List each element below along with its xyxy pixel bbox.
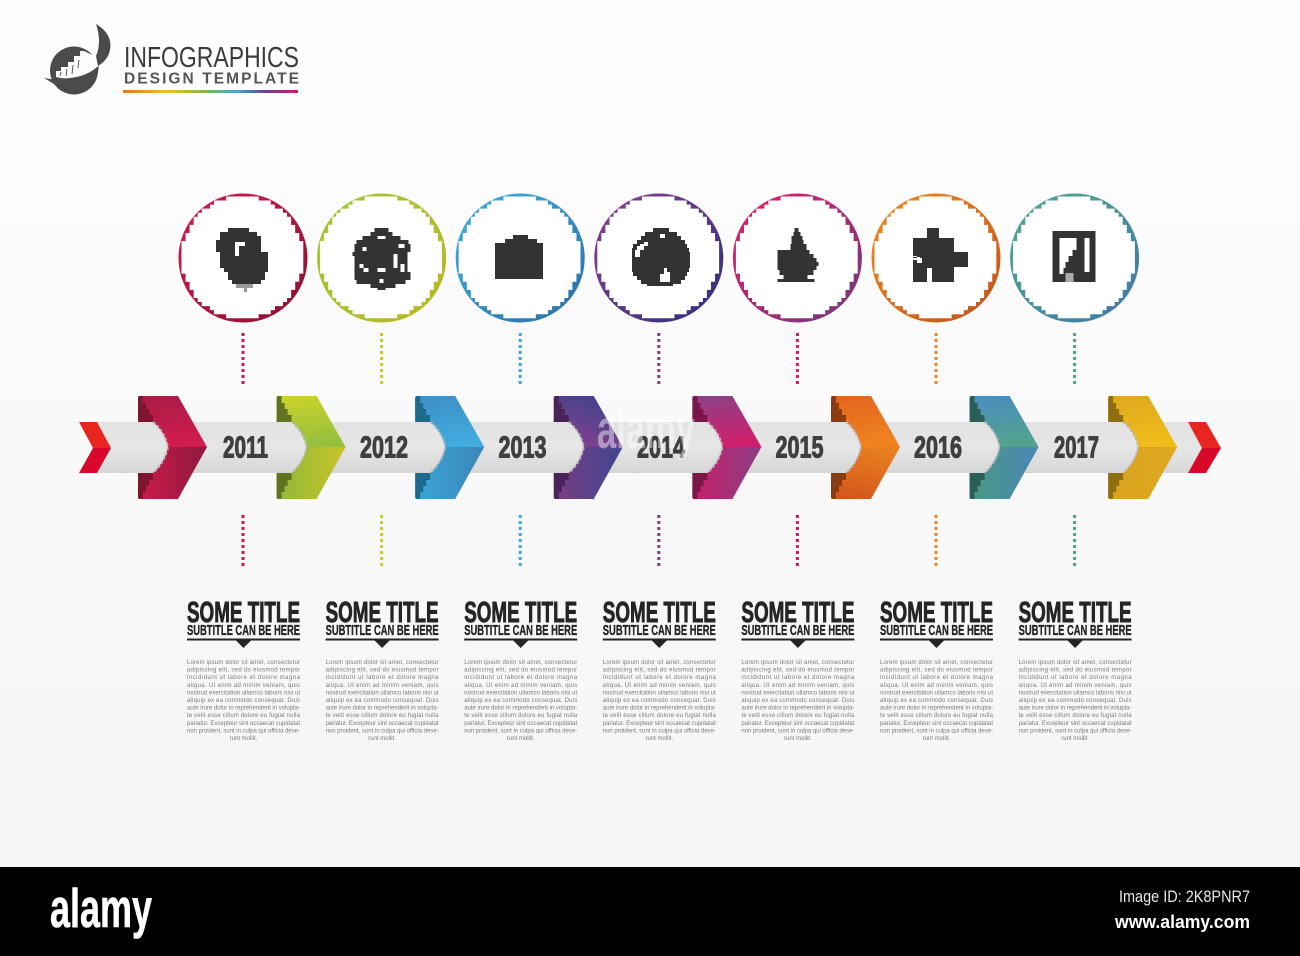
chevron 5 <box>692 396 761 499</box>
body text: aliquip ex ea commodo consequat. Duis <box>880 698 993 704</box>
subtitle: SUBTITLE CAN BE HERE <box>1019 623 1132 639</box>
body text <box>741 660 855 742</box>
chevron 7 <box>970 396 1039 499</box>
body text: Lorem ipsum dolor sit amet, consectetur <box>603 660 716 666</box>
body text <box>187 660 301 742</box>
chevron 2 <box>277 396 346 499</box>
body text: runt mollit. <box>645 736 673 742</box>
body text: te velit esse cillum dolore eu fugiat nulla <box>464 713 578 719</box>
subtitle: SUBTITLE CAN BE HERE <box>187 623 300 639</box>
title: SOME TITLE <box>187 597 300 629</box>
chevron 8 <box>1108 396 1177 499</box>
body text: non proident, sunt in culpa qui officia dese- <box>603 728 716 734</box>
footer band <box>0 867 1300 956</box>
title: SOME TITLE <box>326 597 439 629</box>
body text: aliqua. Ut enim ad minim veniam, quis <box>603 683 716 689</box>
footer brand: alamy <box>50 877 152 939</box>
year 2013: 2013 <box>498 430 546 464</box>
body text <box>326 660 439 742</box>
text column 2013 <box>464 597 578 742</box>
body text: runt mollit. <box>230 736 258 742</box>
title: SOME TITLE <box>1019 597 1132 629</box>
body text: nostrud exercitation ullamco laboris nisi ut <box>326 690 439 696</box>
body text: adipiscing elit, sed do eiusmod tempor <box>880 668 993 674</box>
year 2017: 2017 <box>1054 430 1099 464</box>
subtitle: SUBTITLE CAN BE HERE <box>880 623 993 639</box>
connector 2014 <box>657 333 660 569</box>
year 2012: 2012 <box>360 430 408 464</box>
body text <box>603 660 716 742</box>
body text: pariatur. Excepteur sint occaecat cupidatat <box>326 721 439 727</box>
subtitle: SUBTITLE CAN BE HERE <box>464 623 577 639</box>
connector 2015 <box>796 333 799 569</box>
body text: adipiscing elit, sed do eiusmod tempor <box>1019 668 1132 674</box>
circle 2013: bag <box>456 194 585 322</box>
text column 2017 <box>1019 597 1132 742</box>
body text: Lorem ipsum dolor sit amet, consectetur <box>741 660 854 666</box>
body text: non proident, sunt in culpa qui officia dese- <box>326 728 439 734</box>
year 2016: 2016 <box>914 430 962 464</box>
logo <box>44 24 299 94</box>
logo subtitle: DESIGN TEMPLATE <box>124 70 299 88</box>
text column 2015 <box>741 597 855 742</box>
body text: adipiscing elit, sed do eiusmod tempor <box>464 668 577 674</box>
end arrow <box>1188 422 1221 473</box>
body text: incididunt ut labore et dolore magna <box>1019 675 1132 681</box>
body text: nostrud exercitation ullamco laboris nisi ut <box>880 690 993 696</box>
body text: aliqua. Ut enim ad minim veniam, quis <box>741 683 854 689</box>
pointer rule <box>464 638 577 648</box>
circle 2014: ball <box>594 194 723 322</box>
body text: Lorem ipsum dolor sit amet, consectetur <box>464 660 577 666</box>
body text: runt mollit. <box>368 736 396 742</box>
body text: non proident, sunt in culpa qui officia dese- <box>880 728 993 734</box>
body text: nostrud exercitation ullamco laboris nisi ut <box>1019 690 1132 696</box>
body text: runt mollit. <box>507 736 535 742</box>
body text: Lorem ipsum dolor sit amet, consectetur <box>187 660 300 666</box>
pointer rule <box>326 638 439 648</box>
body text <box>464 660 578 742</box>
body text: non proident, sunt in culpa qui officia dese- <box>464 728 577 734</box>
body text: runt mollit. <box>784 736 812 742</box>
body text: aliqua. Ut enim ad minim veniam, quis <box>326 683 439 689</box>
body text: nostrud exercitation ullamco laboris nisi ut <box>464 690 578 696</box>
body text: te velit esse cillum dolore eu fugiat nulla <box>603 713 716 719</box>
body text: incididunt ut labore et dolore magna <box>326 675 439 681</box>
body text: aliqua. Ut enim ad minim veniam, quis <box>464 683 577 689</box>
rainbow bar <box>123 90 298 93</box>
body text <box>1019 660 1132 742</box>
body text: incididunt ut labore et dolore magna <box>741 675 855 681</box>
circle 2015: thumb up <box>733 194 862 322</box>
connector 2012 <box>380 333 383 569</box>
body text: nostrud exercitation ullamco laboris nisi ut <box>603 690 716 696</box>
chevron 1 <box>138 396 207 499</box>
body text: Lorem ipsum dolor sit amet, consectetur <box>326 660 439 666</box>
circle 2011: balloon <box>178 194 308 322</box>
connector 2016 <box>934 333 938 569</box>
body text: aliqua. Ut enim ad minim veniam, quis <box>1019 683 1132 689</box>
subtitle: SUBTITLE CAN BE HERE <box>741 623 855 639</box>
body text: runt mollit. <box>923 736 951 742</box>
pointer rule <box>741 638 854 648</box>
body text: aute irure dolor in reprehenderit in volupta- <box>464 706 577 712</box>
body text: nostrud exercitation ullamco laboris nisi ut <box>187 690 300 696</box>
body text: incididunt ut labore et dolore magna <box>880 675 994 681</box>
title: SOME TITLE <box>603 597 716 629</box>
footer url: www.alamy.com <box>1114 912 1250 932</box>
year 2011: 2011 <box>223 430 268 464</box>
logo mark <box>44 24 110 94</box>
body text: incididunt ut labore et dolore magna <box>187 675 301 681</box>
subtitle: SUBTITLE CAN BE HERE <box>326 623 439 639</box>
body text: pariatur. Excepteur sint occaecat cupidatat <box>603 721 716 727</box>
body text: pariatur. Excepteur sint occaecat cupidatat <box>741 721 855 727</box>
subtitle: SUBTITLE CAN BE HERE <box>603 623 716 639</box>
body text: runt mollit. <box>1061 736 1089 742</box>
image id: Image ID: 2K8PNR7 <box>1119 887 1250 906</box>
body text: pariatur. Excepteur sint occaecat cupidatat <box>464 721 578 727</box>
body text: aute irure dolor in reprehenderit in volupta- <box>880 706 993 712</box>
body text: pariatur. Excepteur sint occaecat cupidatat <box>187 721 300 727</box>
body text: non proident, sunt in culpa qui officia dese- <box>187 728 300 734</box>
body text: aute irure dolor in reprehenderit in volupta- <box>187 706 300 712</box>
body text: aliquip ex ea commodo consequat. Duis <box>603 698 716 704</box>
title: SOME TITLE <box>880 597 993 629</box>
connector 2011 <box>242 333 244 569</box>
body text: te velit esse cillum dolore eu fugiat nulla <box>880 713 994 719</box>
pointer rule <box>1019 638 1132 648</box>
body text: te velit esse cillum dolore eu fugiat nulla <box>326 713 439 719</box>
body text: aliquip ex ea commodo consequat. Duis <box>187 698 300 704</box>
body text: Lorem ipsum dolor sit amet, consectetur <box>880 660 993 666</box>
title: SOME TITLE <box>464 597 577 629</box>
text column 2016 <box>880 597 994 742</box>
body text: adipiscing elit, sed do eiusmod tempor <box>603 668 716 674</box>
body text: aliquip ex ea commodo consequat. Duis <box>741 698 854 704</box>
logo title: INFOGRAPHICS <box>124 42 299 74</box>
body text: adipiscing elit, sed do eiusmod tempor <box>187 668 300 674</box>
watermark: alamy <box>597 398 695 460</box>
body text: te velit esse cillum dolore eu fugiat nulla <box>187 713 301 719</box>
pointer rule <box>880 638 993 648</box>
timeline <box>79 396 1221 499</box>
body text: aliqua. Ut enim ad minim veniam, quis <box>880 683 993 689</box>
text column 2014 <box>603 597 716 742</box>
body text: pariatur. Excepteur sint occaecat cupidatat <box>880 721 993 727</box>
icon circles <box>178 194 1139 322</box>
chevron 6 <box>831 396 900 499</box>
connector 2013 <box>519 333 522 569</box>
body text: aliquip ex ea commodo consequat. Duis <box>464 698 577 704</box>
body text: aute irure dolor in reprehenderit in volupta- <box>1019 706 1132 712</box>
body text: non proident, sunt in culpa qui officia dese- <box>741 728 854 734</box>
connector 2017 <box>1073 333 1076 569</box>
chevron 3 <box>415 396 484 499</box>
body text: incididunt ut labore et dolore magna <box>603 675 716 681</box>
body text: te velit esse cillum dolore eu fugiat nulla <box>741 713 855 719</box>
body text: nostrud exercitation ullamco laboris nisi ut <box>741 690 855 696</box>
body text: incididunt ut labore et dolore magna <box>464 675 578 681</box>
body text: Lorem ipsum dolor sit amet, consectetur <box>1019 660 1132 666</box>
pointer rule <box>603 638 716 648</box>
body text: aute irure dolor in reprehenderit in volupta- <box>326 706 439 712</box>
body text: aliquip ex ea commodo consequat. Duis <box>1019 698 1132 704</box>
body text: aliqua. Ut enim ad minim veniam, quis <box>187 683 300 689</box>
body text: non proident, sunt in culpa qui officia dese- <box>1019 728 1132 734</box>
year 2014: 2014 <box>637 430 686 464</box>
body text: aliquip ex ea commodo consequat. Duis <box>326 698 439 704</box>
title: SOME TITLE <box>741 597 854 629</box>
body text: pariatur. Excepteur sint occaecat cupidatat <box>1019 721 1132 727</box>
body text: adipiscing elit, sed do eiusmod tempor <box>741 668 854 674</box>
body text <box>880 660 994 742</box>
body text: adipiscing elit, sed do eiusmod tempor <box>326 668 439 674</box>
dotted connectors <box>243 333 1075 569</box>
text column 2012 <box>326 597 439 742</box>
body text: aute irure dolor in reprehenderit in volupta- <box>741 706 854 712</box>
body text: te velit esse cillum dolore eu fugiat nulla <box>1019 713 1132 719</box>
body text: aute irure dolor in reprehenderit in volupta- <box>603 706 716 712</box>
circle 2012: gear <box>317 194 446 322</box>
year 2015: 2015 <box>776 430 824 464</box>
circle 2017: tablet <box>1010 194 1139 322</box>
circle 2016: puzzle piece <box>872 194 1000 322</box>
chevron 4 <box>554 396 623 499</box>
start arrow <box>79 422 111 473</box>
pointer rule <box>187 638 300 648</box>
text column 2011 <box>187 597 301 742</box>
grey band <box>96 422 1202 473</box>
